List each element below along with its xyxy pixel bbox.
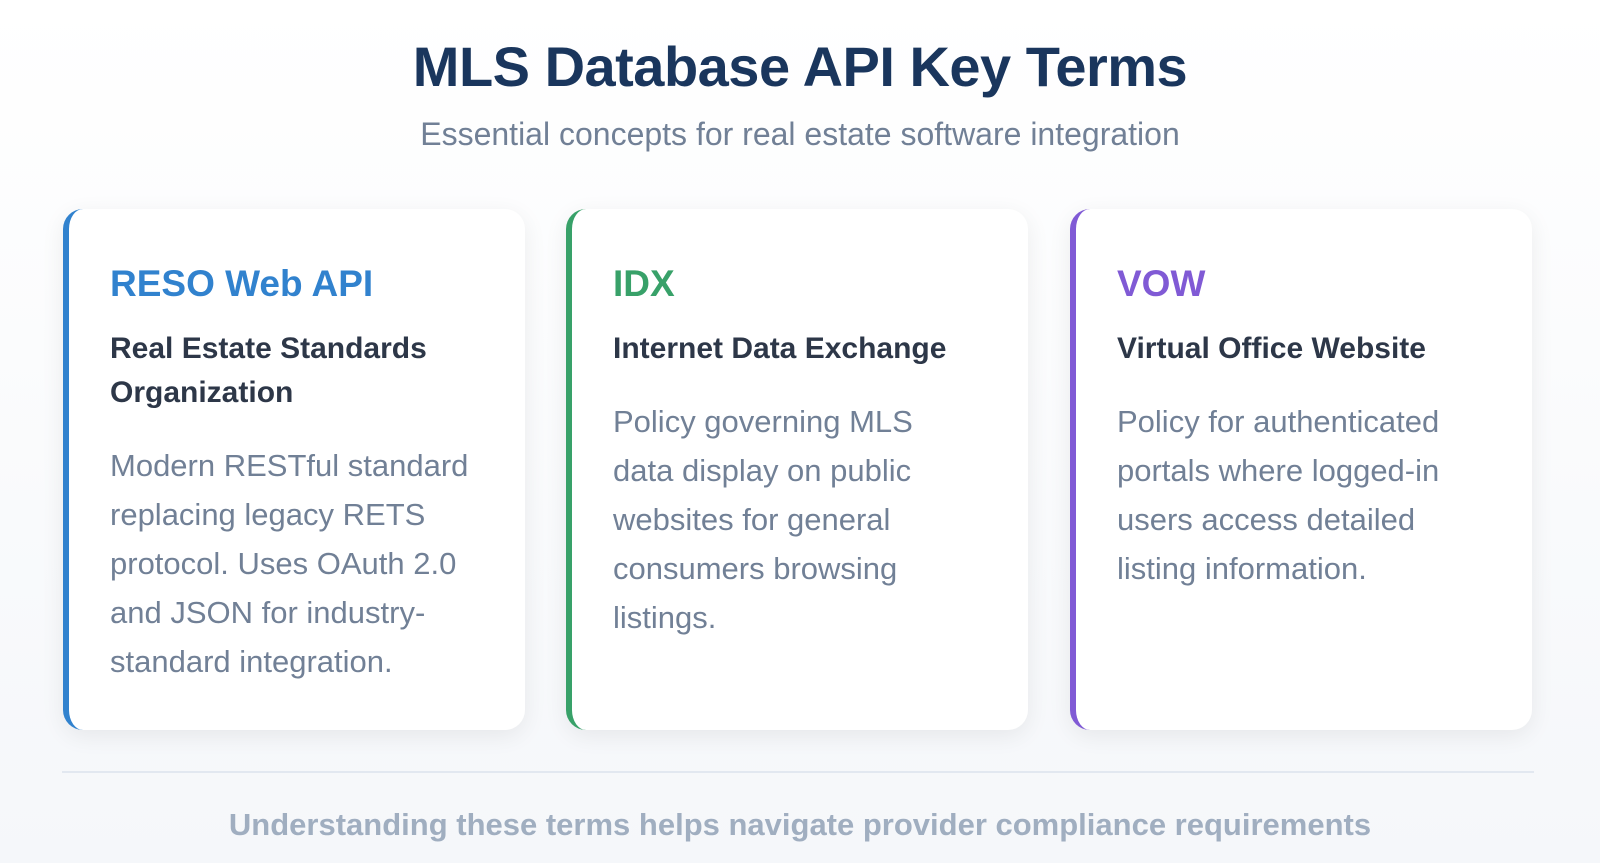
heading: RESO Web API: RESO Web API (110, 263, 373, 304)
description: listing information. (1117, 551, 1367, 586)
heading: IDX: IDX (613, 263, 675, 304)
panel: IDX (566, 209, 1028, 730)
description (1117, 404, 1439, 586)
description: replacing legacy RETS (110, 497, 425, 532)
footer note: Understanding these terms helps navigate provider compliance requirements (229, 807, 1371, 842)
description: Policy for authenticated (1117, 404, 1439, 439)
subheading: Internet Data Exchange (613, 332, 946, 365)
description: websites for general (613, 502, 890, 537)
description: portals where logged-in (1117, 453, 1439, 488)
subheading: Real Estate Standards (110, 332, 427, 365)
subheading (110, 332, 427, 409)
subtitle: Essential concepts for real estate software integration (420, 116, 1180, 152)
description: data display on public (613, 453, 911, 488)
description (110, 448, 468, 679)
description: standard integration. (110, 644, 393, 679)
description: users access detailed (1117, 502, 1415, 537)
panel: VOW (1070, 209, 1532, 730)
description: and JSON for industry- (110, 595, 425, 630)
heading: VOW: VOW (1117, 263, 1205, 304)
description: Modern RESTful standard (110, 448, 468, 483)
subheading: Virtual Office Website (1117, 332, 1426, 365)
description (613, 404, 913, 635)
description: consumers browsing (613, 551, 897, 586)
subheading: Organization (110, 376, 293, 409)
description: protocol. Uses OAuth 2.0 (110, 546, 456, 581)
panel: RESO Web API (63, 209, 525, 730)
description: Policy governing MLS (613, 404, 913, 439)
title: MLS Database API Key Terms (413, 35, 1187, 98)
description: listings. (613, 600, 716, 635)
